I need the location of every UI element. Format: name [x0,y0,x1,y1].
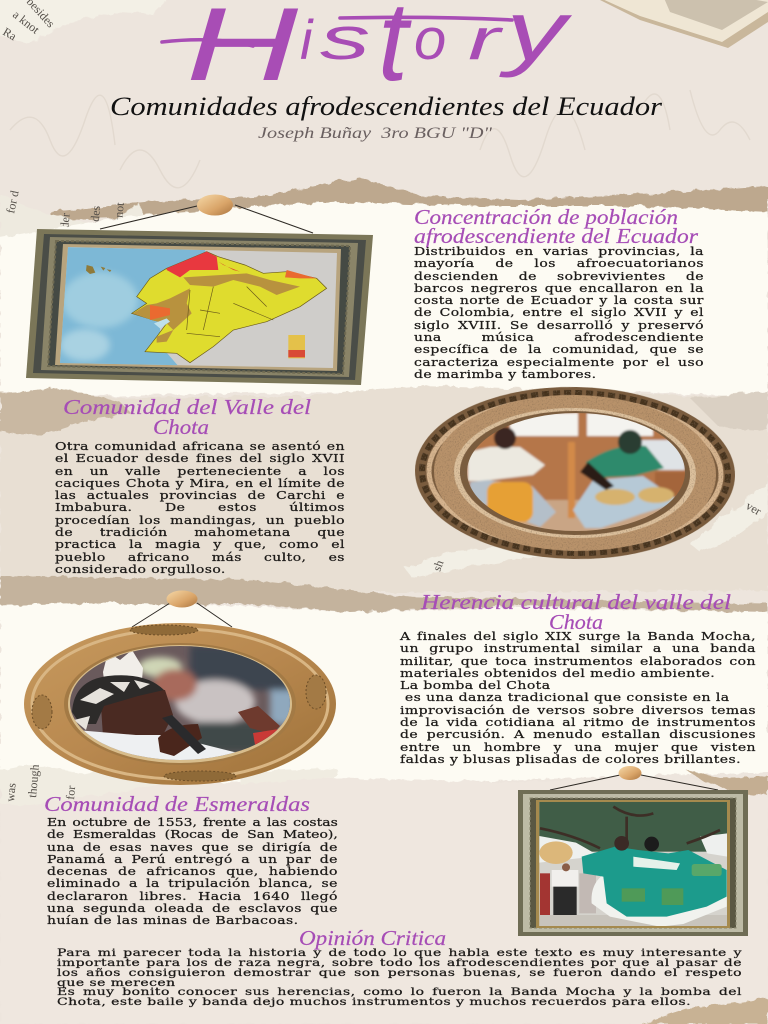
text block: herencia cultural: materiales obtenidos del medio ambiente. [400,667,715,680]
text block: esmeraldas: eliminado a la tripulación blanca, se [47,877,338,890]
text block: opinion critica: Es muy bonito conocer sus herencias, como lo fueron la Banda Mocha y la bomba del [57,986,742,998]
text block: herencia cultural: improvisación de versos sobre diversos temas [400,704,756,717]
frame [26,229,373,385]
text block: herencia cultural: faldas y blusas plisadas de colores brillantes. [400,753,741,766]
text block: valle del chota: procedían los mandingas, un pueblo [55,514,345,527]
text block: valle del chota [55,440,345,576]
heading: valle del chota: Comunidad del Valle del [63,395,311,419]
text block: valle del chota: Imbabura. De estos últimos [55,501,345,514]
text block: esmeraldas: huían de las minas de Barbacoas. [47,914,299,927]
title: r [468,7,504,72]
subtitle: Comunidades afrodescendientes del Ecuador [110,92,663,121]
heading: opinion critica: Opinión Critica [299,926,446,950]
torn paper: brown patch right of dance picture [686,770,768,796]
text block: herencia cultural [400,630,756,766]
text block: esmeraldas: declararon libres. Hacia 1640 llegó [47,890,338,903]
text block: herencia cultural: de la vida cotidiana al ritmo de instrumentos [400,716,756,729]
text block: opinion critica: Para mi parecer toda la historia y de todo lo que habla este texto es muy interesante y [57,947,742,959]
author: Joseph Buñay 3ro BGU "D" [258,125,492,142]
text block: concentracion: barcos negreros que encallaron en la [414,282,704,295]
text block: herencia cultural: es una danza tradicional que consiste en la [405,691,730,704]
torn paper: newspaper strips around drum picture: ver [744,498,764,518]
picture: oval frame with singer [24,590,336,785]
frame [24,623,336,785]
text block: opinion critica: Chota, este baile y banda dejo muchos instrumentos y muchos recuerdos para ellos. [57,996,691,1008]
text block: concentracion: Distribuidos en varias provincias, la [414,245,704,258]
text block: herencia cultural: entre un hombre y una mujer que visten [400,741,756,754]
title [162,0,573,104]
text block: valle del chota: el Ecuador desde fines del siglo XVII [55,452,345,465]
photo [70,646,290,760]
text block: concentracion [414,245,704,381]
picture: hanging frame with map of Ecuador [26,194,373,385]
torn paper: newspaper strip lower left [0,764,336,806]
text block: concentracion: una música afrodescendiente [414,331,704,344]
title: o [414,7,446,72]
text block: valle del chota: considerado orgulloso. [55,563,226,576]
heading: herencia cultural: Herencia cultural del valle del [420,590,731,614]
text block: esmeraldas [47,816,338,927]
text block: opinion critica: que se merecen [57,977,176,989]
text block: concentracion: específica de la comunidad, que se [414,343,704,356]
title: i [300,8,314,71]
nail and strings [550,766,718,790]
text block: esmeraldas: decenas de africanos que, habiendo [47,865,338,878]
photo [467,413,685,531]
torn paper: cream band three [0,602,768,782]
text block: herencia cultural: un grupo instrumental similar a una banda [400,642,756,655]
text block: opinion critica: importante para los de raza negra, sobre todo los afrodescendientes por que al pasar de [57,957,742,969]
nail and strings [100,194,313,233]
torn paper: newspaper strips around drum picture [405,484,768,578]
text block: concentracion: caracteriza especialmente por el uso [414,356,704,369]
torn paper: newspaper strip upper left: for d [3,189,22,215]
text block: opinion critica [57,947,742,1008]
torn paper: beige band two [0,386,768,592]
heading: esmeraldas: Comunidad de Esmeraldas [44,792,310,816]
torn paper: brown patch bottom right [640,998,768,1024]
text block: herencia cultural: A finales del siglo XIX surge la Banda Mocha, [400,630,756,643]
torn paper: left brown patch [0,388,132,436]
text block: concentracion: mayoría de los afroecuatorianos [414,257,704,270]
text block: valle del chota: practica la magia y que, como el [55,538,345,551]
text block: valle del chota: en un valle perteneciente a los [55,465,345,478]
newspaper scrap top left: Ra [1,24,20,44]
text block: concentracion: descienden de sobrevivientes de [414,270,704,283]
picture: oval frame with two drummers [414,384,736,562]
text block: herencia cultural: militar, que toca instrumentos elaborados con [400,655,756,668]
heading: valle del chota: Chota [153,415,209,439]
heading: herencia cultural: Chota [549,610,603,634]
text block: valle del chota: pueblo africano más culto, es [55,551,345,564]
heading: concentracion: afrodescendiente del Ecuador [414,224,699,248]
torn paper: middle brown strip [0,575,768,612]
text block: esmeraldas: una segunda oleada de esclavos que [47,902,338,915]
picture: hanging frame with dancers [518,766,748,936]
heading: concentracion: Concentración de población [414,205,678,229]
text block: valle del chota: las actuales provincias de Carchi e [55,489,345,502]
text block: valle del chota: de tradición mahometana que [55,526,345,539]
torn paper: newspaper strip upper left: ider [57,212,73,232]
text block: concentracion: de marimba y tambores. [414,368,597,381]
text block: valle del chota: Otra comunidad africana se asentó en [55,440,345,453]
text block: concentracion: siglo XVIII. Se desarrolló y preservó [414,319,704,332]
torn paper: top brown strip [50,178,768,220]
frame [414,384,736,562]
text block: esmeraldas: una de esas naves que se dirigía de [47,841,338,854]
title: s [320,5,370,72]
frame [518,790,748,936]
torn paper: newspaper strip upper left: sides [87,205,103,230]
text block: herencia cultural: La bomba del Chota [400,679,551,692]
photo [539,802,727,927]
map [60,247,337,368]
torn paper: newspaper strip lower left: was [3,782,19,802]
nail and strings [132,590,232,627]
text block: herencia cultural: de percusión. A menudo estallan discusiones [400,728,756,741]
text block: esmeraldas: En octubre de 1553, frente a las costas [47,816,338,829]
torn paper: newspaper strip upper left [0,189,150,250]
torn paper: newspaper strips around drum picture: sh [430,558,446,573]
torn paper: right grey patch [690,392,768,430]
torn paper: newspaper strip lower left: though [25,764,42,798]
text block: valle del chota: caciques Chota y Mira, en el límite de [55,477,345,490]
text block: esmeraldas: Panamá a Perú entregó a un par de [47,853,338,866]
torn paper: newspaper strip upper left: knot [111,201,127,224]
torn paper: cream band one [0,202,768,396]
open book top right [596,0,768,48]
text block: esmeraldas: de Esmeraldas (Rocas de San Mateo), [47,828,338,841]
text block: concentracion: costa norte de Ecuador y la costa sur [414,294,704,307]
newspaper scrap top left: a knot [10,7,43,37]
newspaper scrap top left [0,0,172,44]
text block: opinion critica: los años consiguieron demostrar que son personas buenas, se fueron dando el respeto [57,967,742,979]
torn paper: bottom band [0,778,768,1024]
torn paper: newspaper strip lower left: for [63,785,78,800]
text block: concentracion: de Colombia, entre el siglo XVII y el [414,306,704,319]
